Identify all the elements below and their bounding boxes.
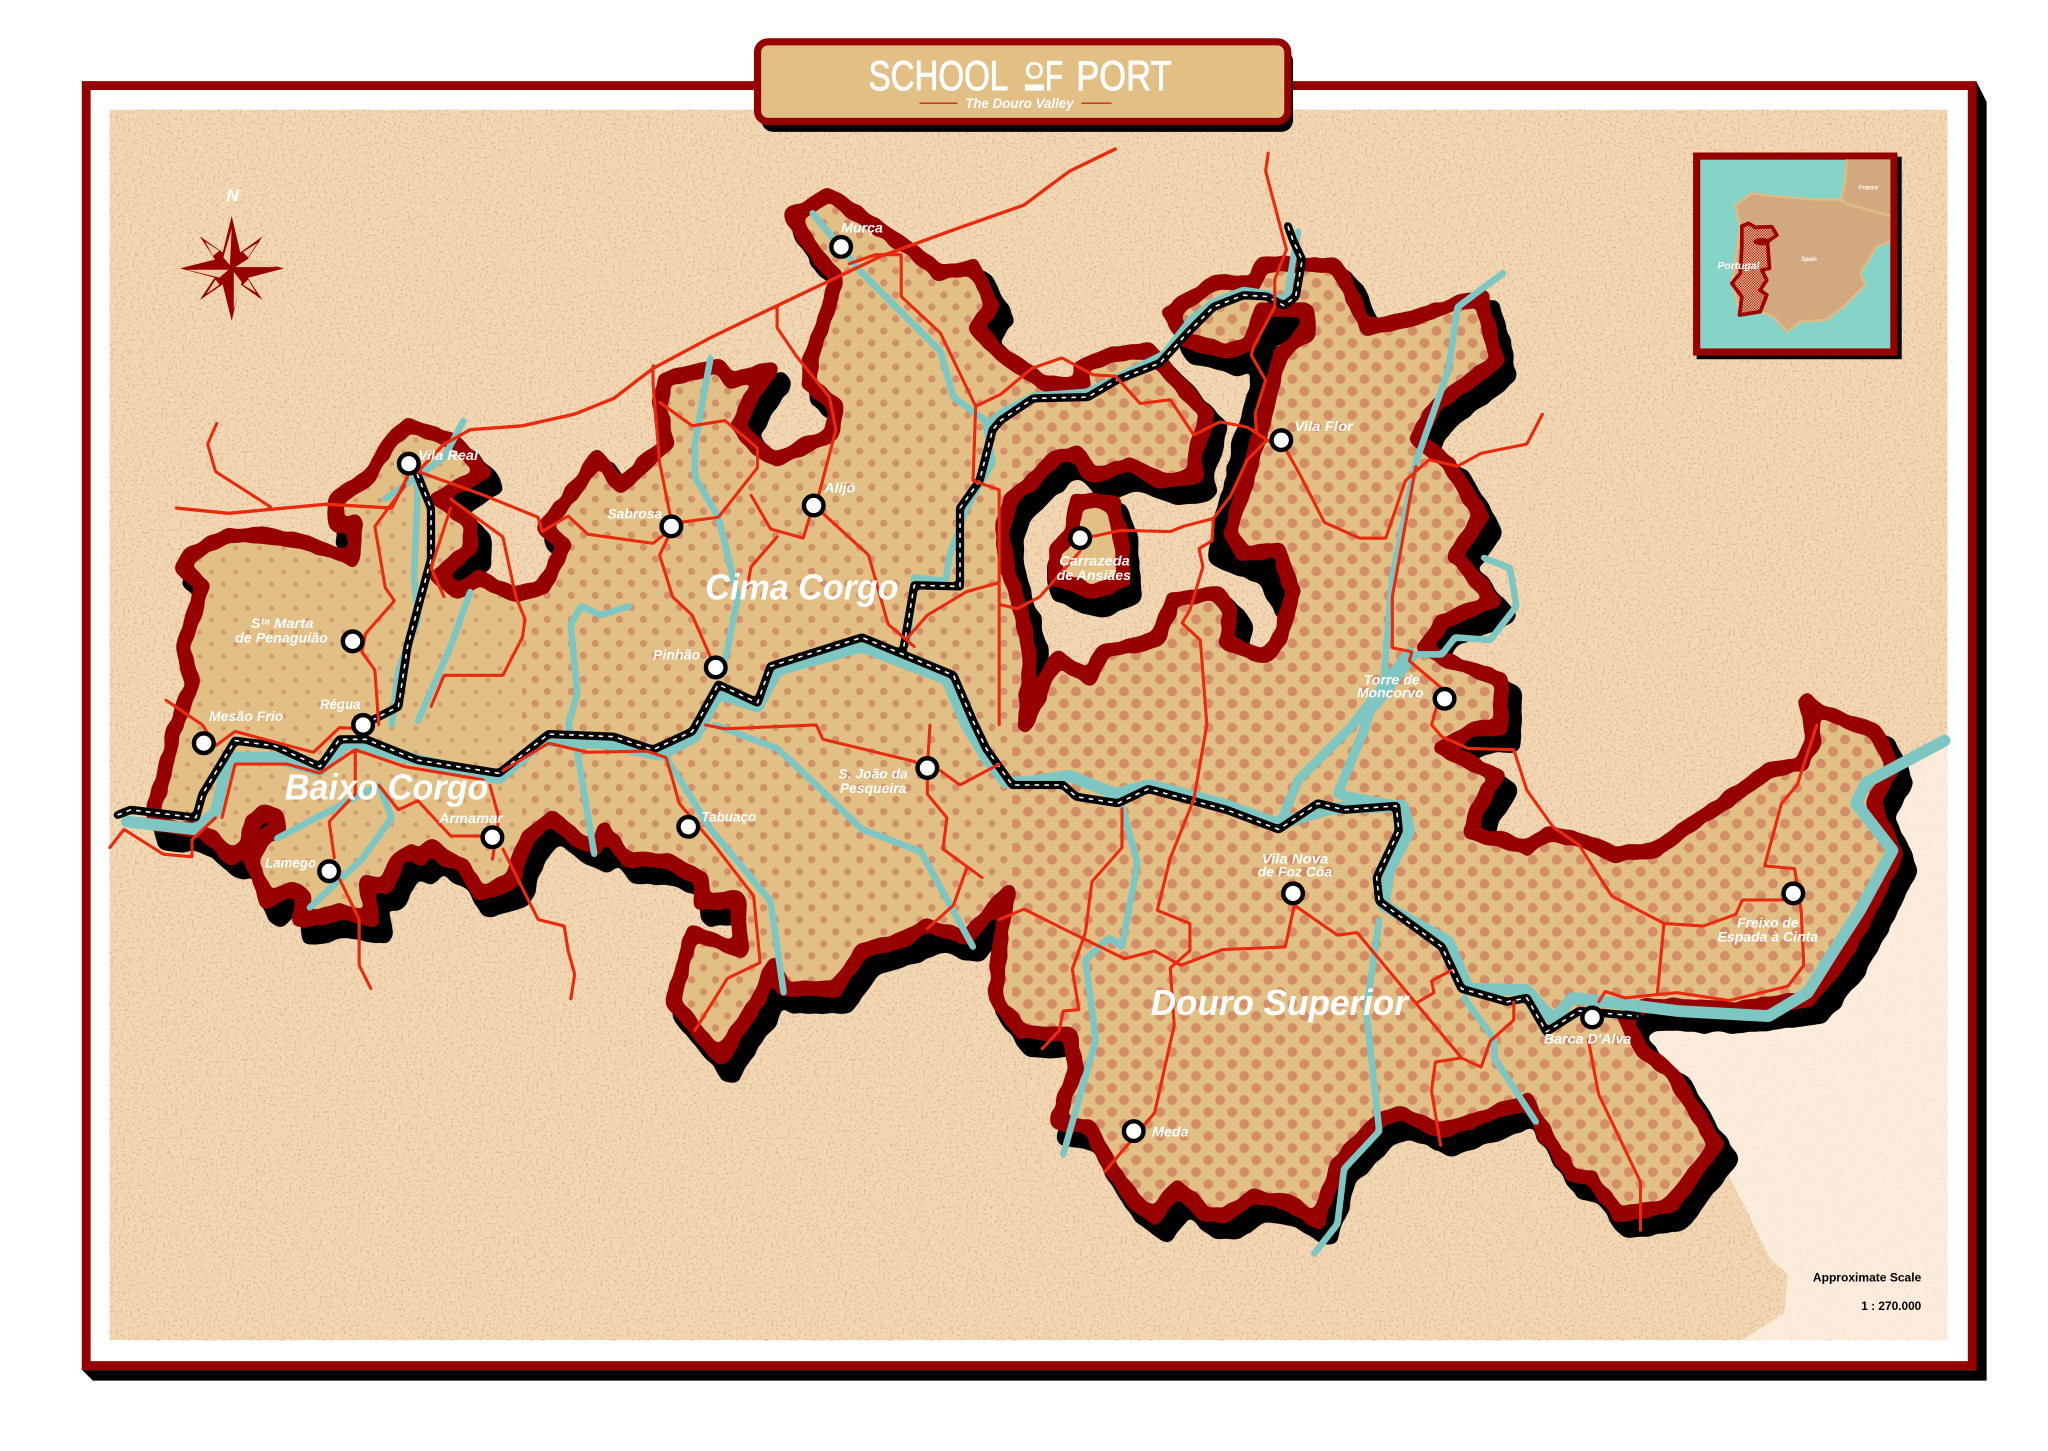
town labels: Meda xyxy=(1152,1124,1189,1139)
subtitle: The Douro Valley xyxy=(965,96,1075,111)
town labels: Barca D'Alva xyxy=(1544,1032,1632,1047)
scale note: Approximate Scale xyxy=(1813,1270,1921,1284)
scale note: 1 : 270.000 xyxy=(1861,1299,1921,1313)
town labels: Carrazeda xyxy=(1059,554,1130,569)
town labels: Moncorvo xyxy=(1357,685,1424,700)
railway lines xyxy=(118,226,1638,1032)
town labels: S. João da xyxy=(839,766,908,781)
compass N label: N xyxy=(226,186,239,205)
sea area xyxy=(1640,739,1947,1340)
town labels: Alijó xyxy=(823,480,856,495)
town labels: Espada à Cinta xyxy=(1718,930,1818,945)
town labels: Sabrosa xyxy=(607,507,663,522)
map background xyxy=(110,110,1947,1340)
scale note xyxy=(1813,1270,1921,1313)
town labels: Armamar xyxy=(438,811,504,826)
island: Carrazeda de Ansiaes xyxy=(1055,500,1123,593)
town labels: Pinhão xyxy=(653,648,700,663)
inset labels: France xyxy=(1859,184,1879,191)
town labels: Murça xyxy=(841,221,883,236)
title text: SCHOOL xyxy=(869,52,1008,99)
region label: Cima Corgo: Cima Corgo xyxy=(705,567,899,608)
roads xyxy=(110,149,1817,1230)
inset labels: Spain xyxy=(1801,256,1817,263)
inset labels: Portugal xyxy=(1718,261,1760,272)
title plate xyxy=(758,42,1293,132)
wine region map xyxy=(110,110,1947,1340)
region label: Douro Superior: Douro Superior xyxy=(1151,982,1410,1023)
town labels: Mesão Frio xyxy=(209,709,283,724)
town labels: Sᵗᵃ Marta xyxy=(251,616,314,631)
region fill with dot pattern xyxy=(161,204,1885,1208)
Portugal xyxy=(1732,223,1777,315)
town labels: Pesqueira xyxy=(840,781,907,796)
inset labels xyxy=(1718,184,1879,272)
town labels: Régua xyxy=(320,697,361,712)
region label: Baixo Corgo: Baixo Corgo xyxy=(285,766,488,807)
town labels: Tabuaço xyxy=(701,810,756,825)
town labels: Torre de xyxy=(1364,672,1420,687)
compass rose xyxy=(180,186,284,321)
town labels: de Penaguião xyxy=(235,631,328,646)
title text: PORT xyxy=(1076,52,1172,99)
rivers xyxy=(127,213,1945,1254)
town labels xyxy=(209,221,1818,1139)
region outline xyxy=(153,195,1896,1221)
title text xyxy=(869,52,1172,99)
title text: F xyxy=(1045,52,1063,99)
town markers xyxy=(194,237,1803,1141)
town labels: de Ansiães xyxy=(1057,568,1131,583)
Spain xyxy=(1732,193,1894,332)
France xyxy=(1840,159,1890,218)
town labels: Vila Nova xyxy=(1262,851,1329,866)
title text: O xyxy=(1025,57,1044,83)
town labels: Lamego xyxy=(265,855,316,870)
town labels: de Foz Côa xyxy=(1258,864,1333,879)
town labels: Freixo de xyxy=(1737,915,1799,930)
inset locator map xyxy=(1697,153,1902,359)
town labels: Vila Flor xyxy=(1294,419,1354,434)
town labels: Vila Real xyxy=(418,448,479,463)
region shadow xyxy=(163,209,1907,1236)
